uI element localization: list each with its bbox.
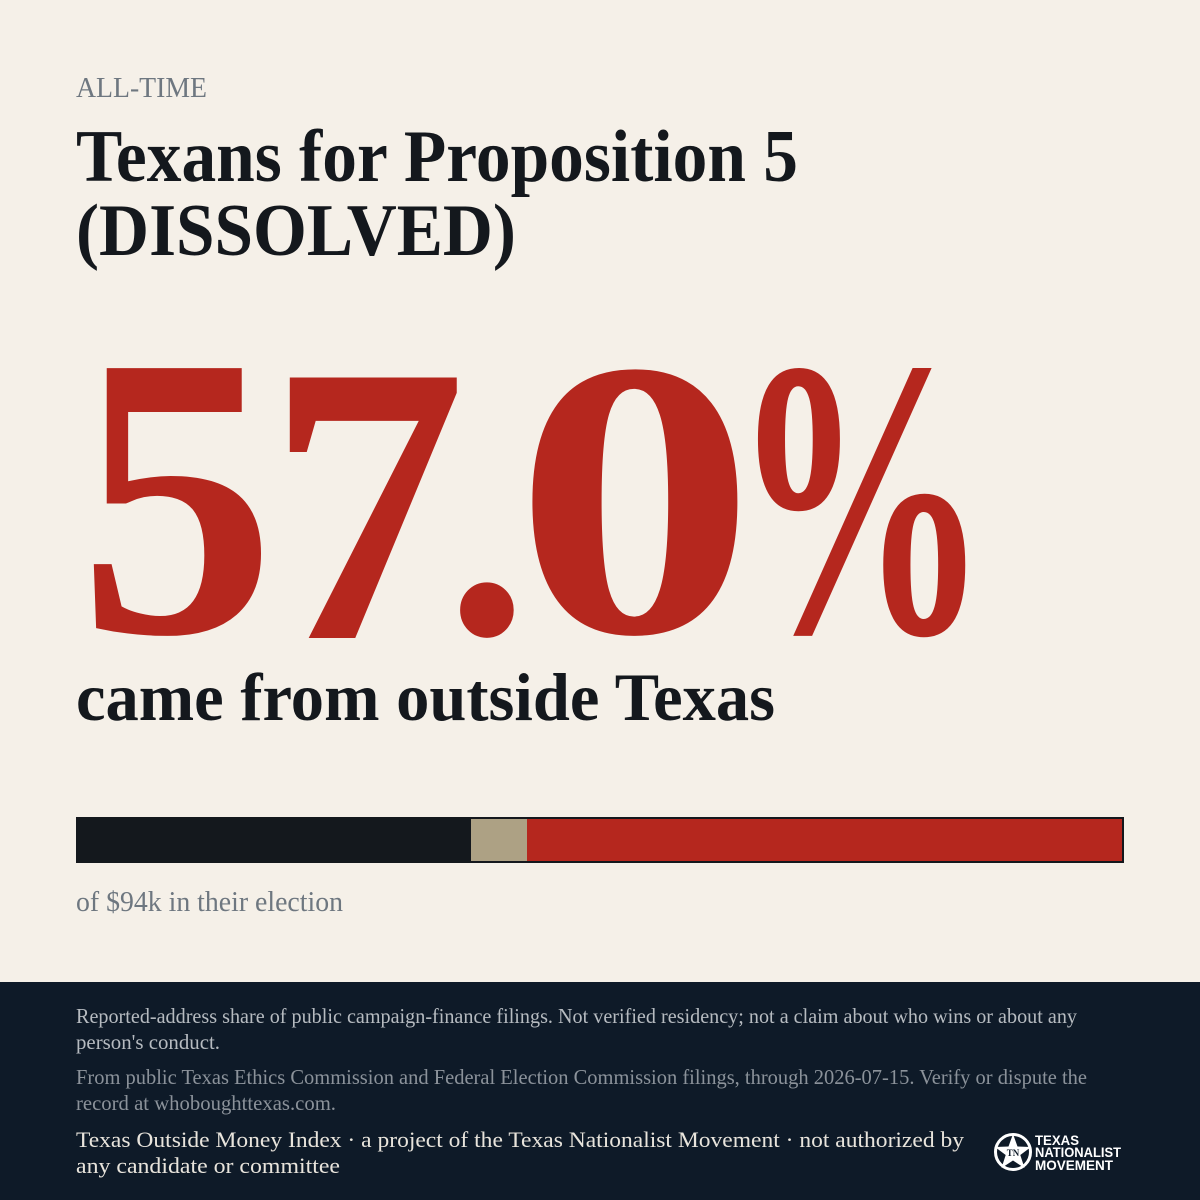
bar caption: of $94k in their election [76, 886, 343, 918]
bar segment: outside Texas share [527, 819, 1122, 861]
footer note: methodology: Reported-address share of public campaign-finance filings. Not verified residency; not a claim about who wins or about any [76, 1004, 1077, 1028]
big percentage figure: 0 [514, 280, 756, 718]
big percentage figure: 7 [267, 285, 466, 725]
big percentage figure: 5 [78, 273, 275, 720]
big percentage figure: % [732, 280, 989, 719]
logo wordmark [1035, 1133, 1122, 1173]
subheading: came from outside Texas [76, 659, 775, 735]
footer credit [76, 1127, 965, 1178]
big percentage figure: . [446, 328, 528, 707]
footer panel [0, 982, 1200, 1200]
logo wordmark: TEXAS [1035, 1133, 1079, 1148]
footer note: methodology [76, 1004, 1077, 1054]
stacked share bar [76, 817, 1124, 863]
logo wordmark: MOVEMENT [1035, 1158, 1114, 1173]
icon: star in ring: TN [1007, 1148, 1020, 1158]
footer note: methodology: person's conduct. [76, 1030, 220, 1054]
footer note: source [76, 1065, 1087, 1115]
title: Texans for Proposition 5 [76, 116, 798, 198]
footer credit: any candidate or committee [76, 1153, 340, 1178]
logo wordmark: NATIONALIST [1035, 1145, 1122, 1160]
bar segment: unknown share [471, 819, 527, 861]
title [76, 116, 798, 272]
title: (DISSOLVED) [76, 190, 516, 272]
footer note: source: record at whoboughttexas.com. [76, 1091, 336, 1115]
logo: Texas Nationalist Movement [995, 1133, 1122, 1173]
big percentage figure [78, 273, 989, 725]
footer credit: Texas Outside Money Index · a project of the Texas Nationalist Movement · not authorized by [76, 1127, 965, 1152]
eyebrow label: ALL-TIME [76, 73, 207, 104]
footer note: source: From public Texas Ethics Commission and Federal Election Commission filings, through 2026-07-15. Verify or dispute the [76, 1065, 1087, 1089]
